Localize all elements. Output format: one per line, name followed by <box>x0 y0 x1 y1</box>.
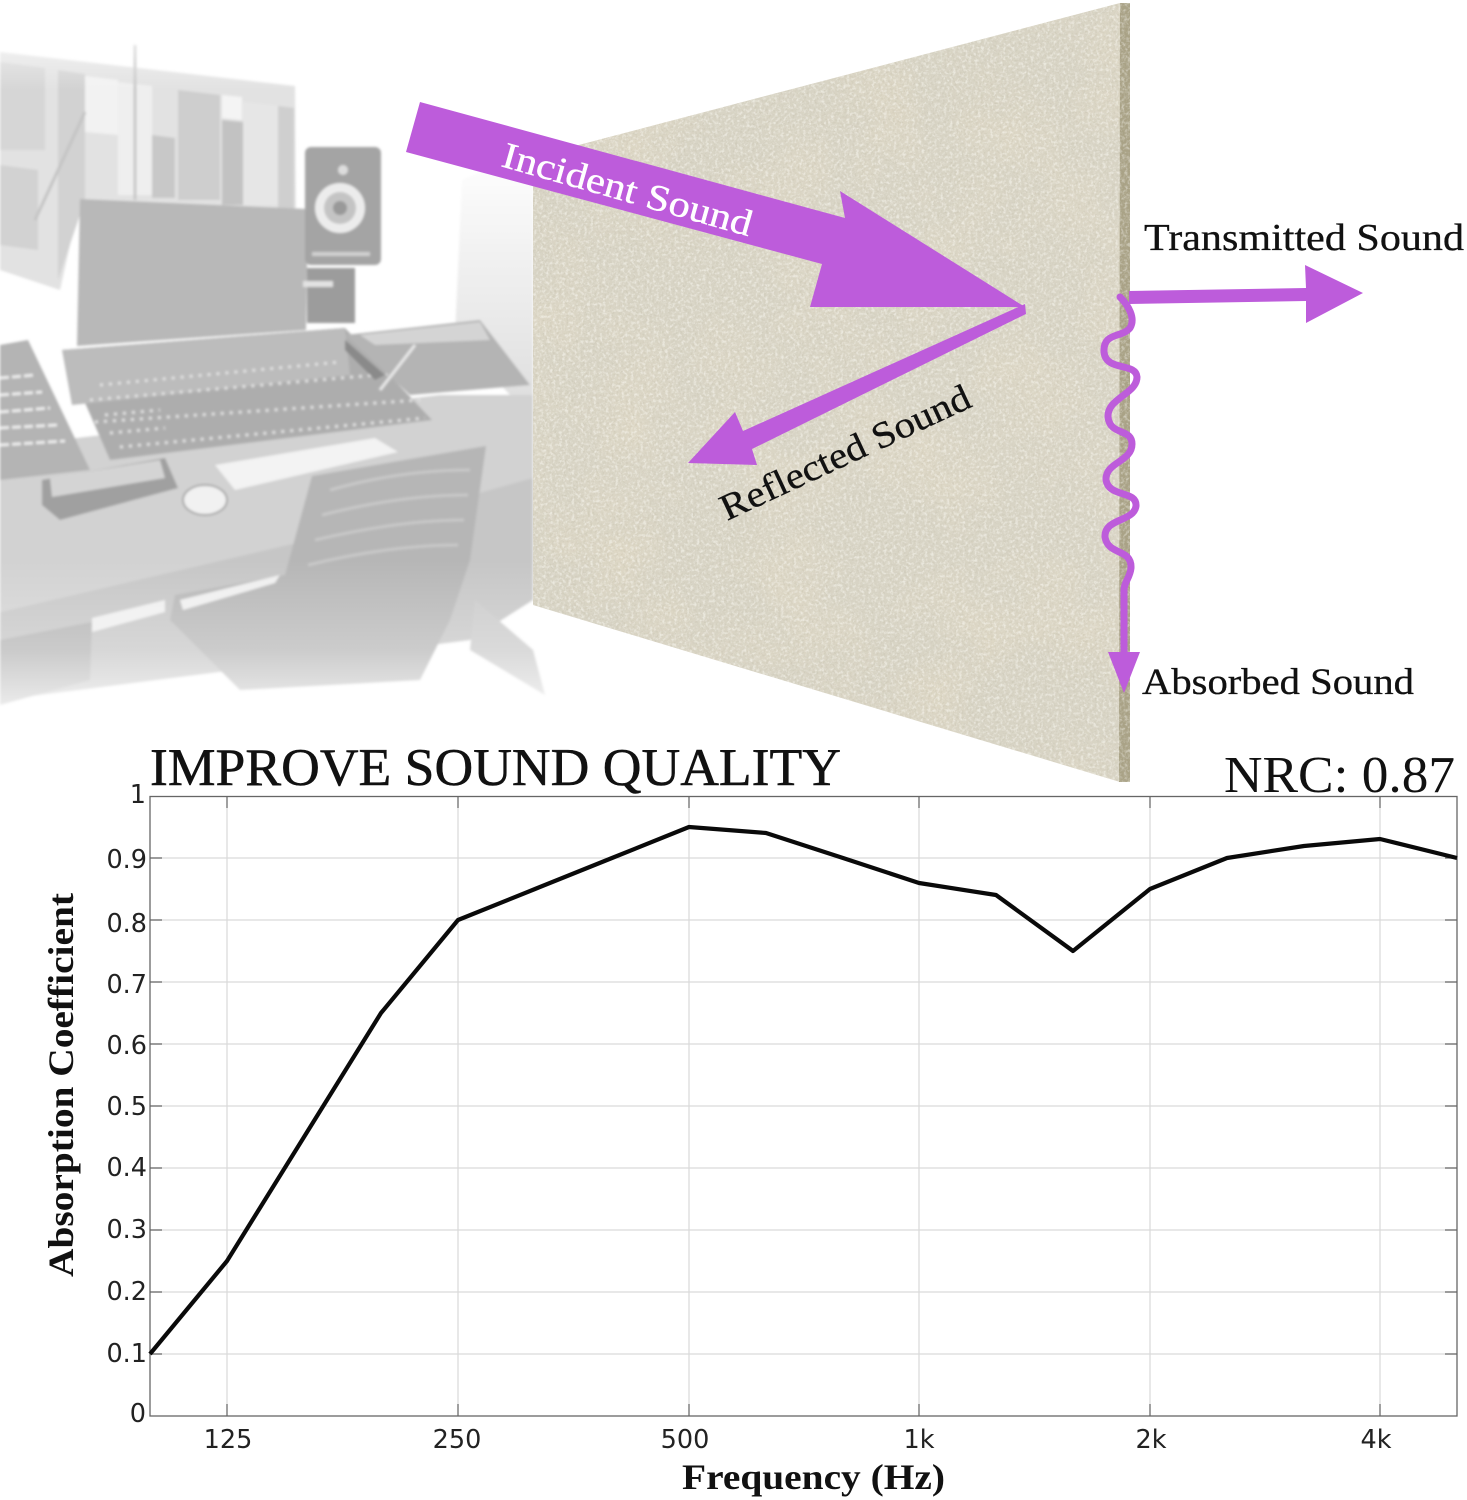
photo fades <box>0 0 560 740</box>
background photo: recording studio <box>0 45 545 705</box>
gridlines <box>150 796 1457 1416</box>
x axis labels <box>204 1425 1392 1455</box>
label: transmitted sound: Transmitted Sound <box>1144 217 1464 259</box>
NRC value: NRC: 0.87 <box>1224 747 1455 804</box>
x axis labels: 125 <box>204 1425 252 1455</box>
audio interface <box>42 458 178 520</box>
y axis labels: 0.2 <box>106 1277 147 1307</box>
y axis labels: 0.5 <box>106 1092 147 1122</box>
outboard gear <box>345 320 530 395</box>
computer keyboard and mouse <box>183 438 398 515</box>
x axis labels: 4k <box>1360 1425 1392 1455</box>
x axis labels: 1k <box>904 1425 935 1455</box>
x axis labels: 2k <box>1136 1425 1167 1455</box>
arrow: incident sound <box>406 102 1025 307</box>
keyboard <box>0 340 90 480</box>
plot frame <box>150 796 1457 1416</box>
y axis labels: 1 <box>130 780 146 810</box>
arrow: transmitted sound <box>1129 265 1363 323</box>
studio window <box>0 45 296 290</box>
x axis labels: 500 <box>661 1425 709 1455</box>
label: absorbed sound: Absorbed Sound <box>1142 662 1415 703</box>
y axis title: Absorption Coefficient <box>41 893 81 1277</box>
label: incident sound: Incident Sound <box>498 135 758 245</box>
arrow: absorbed sound <box>1104 297 1140 693</box>
arrow: reflected sound <box>688 304 1026 465</box>
panel edge <box>1119 3 1130 782</box>
studio monitor screen <box>77 199 308 346</box>
y axis labels: 0.9 <box>106 845 147 875</box>
title: IMPROVE SOUND QUALITY <box>150 739 841 797</box>
y axis labels: 0.7 <box>106 970 147 1000</box>
acoustic panel <box>533 0 1131 785</box>
mixing console <box>62 328 432 460</box>
y axis labels: 0.4 <box>106 1153 147 1183</box>
y axis labels: 0.3 <box>106 1215 147 1245</box>
y axis labels: 0 <box>130 1399 146 1429</box>
desk <box>0 395 533 612</box>
label: reflected sound: Reflected Sound <box>713 377 978 529</box>
wall <box>455 150 533 420</box>
chair <box>170 446 486 690</box>
desk legs <box>0 622 92 705</box>
x axis title: Frequency (Hz) <box>682 1457 945 1497</box>
y axis labels: 0.1 <box>106 1339 147 1369</box>
y axis labels: 0.8 <box>106 909 147 939</box>
tick marks <box>150 796 1457 1416</box>
absorption coefficient chart <box>41 780 1457 1497</box>
y axis labels: 0.6 <box>106 1031 147 1061</box>
absorption curve <box>150 827 1457 1354</box>
x axis labels: 250 <box>433 1425 481 1455</box>
panel face <box>533 0 1123 785</box>
speaker <box>303 147 381 323</box>
y axis labels <box>106 780 147 1429</box>
